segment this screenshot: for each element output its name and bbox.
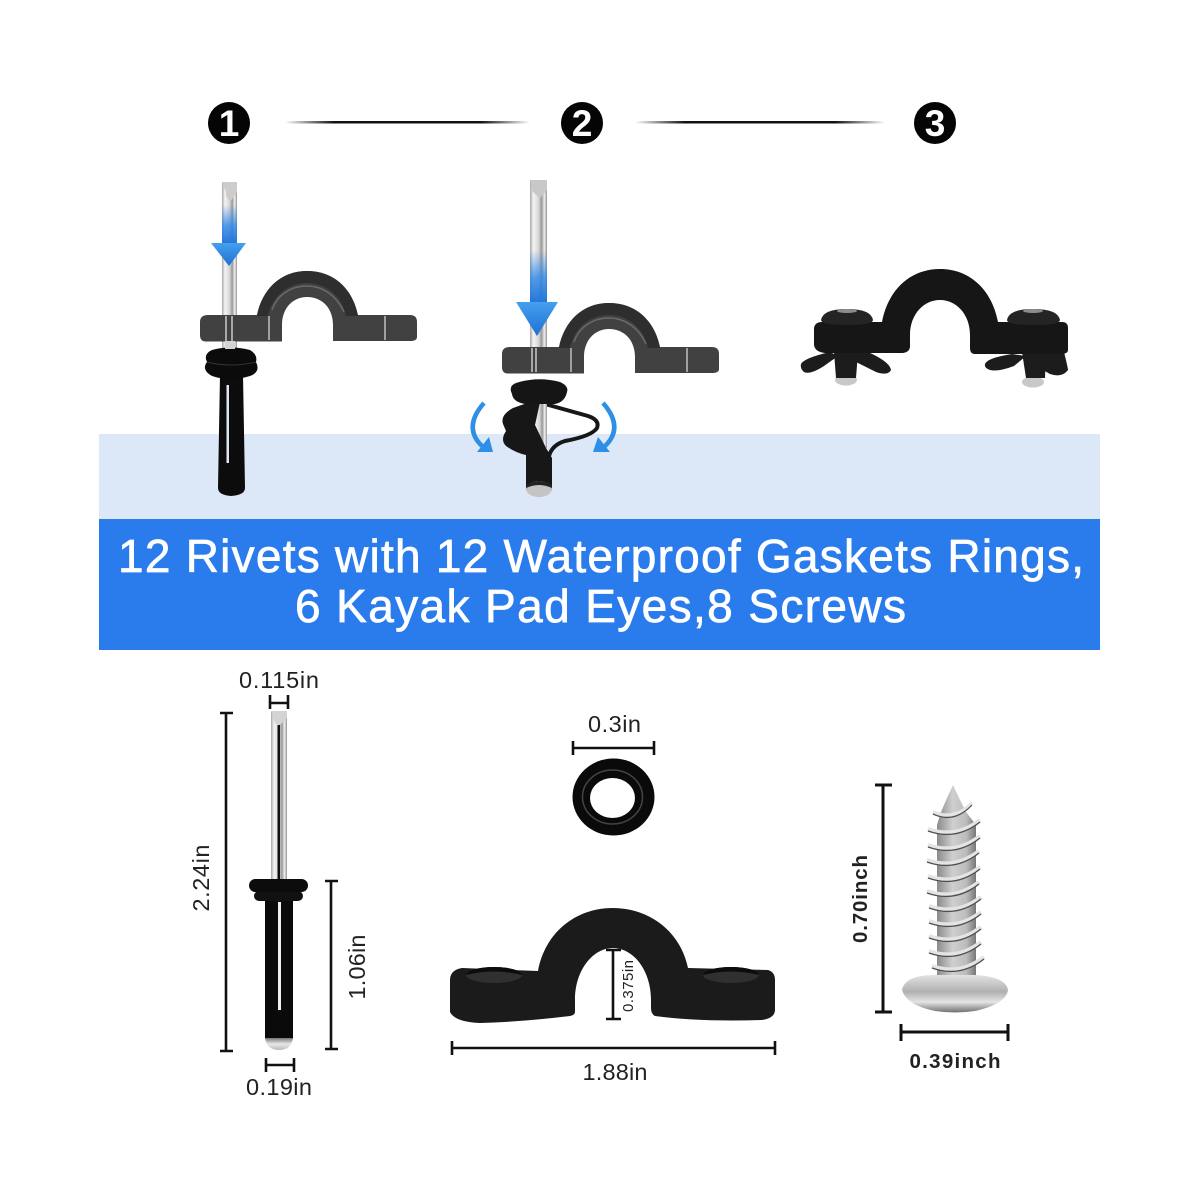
- right hole: [703, 967, 759, 983]
- dimension 2.24in: [188, 713, 233, 1051]
- screw tip and shank: [937, 785, 976, 982]
- right screw head: [1007, 309, 1060, 325]
- dimension 0.39inch: 0.39inch: [910, 1050, 1000, 1073]
- step 2 badge: [561, 102, 603, 144]
- gasket ring diagram: [572, 711, 654, 836]
- rivet mandrel: [222, 182, 237, 352]
- rivet dimension diagram: [188, 667, 370, 1100]
- rivet gaskets: [249, 879, 308, 901]
- dimension 0.70inch: [849, 785, 892, 1012]
- dimension 0.375in: [606, 950, 637, 1019]
- left rivet tip: [835, 374, 857, 386]
- light blue band: [99, 434, 1100, 519]
- left curved arrow: [473, 403, 493, 452]
- step 3 illustration: installed pad eye: [801, 269, 1068, 388]
- connector line 2 to 3: [635, 121, 885, 124]
- step 1 badge: 1: [219, 103, 239, 144]
- banner line 2: 6 Kayak Pad Eyes,8 Screws: [295, 580, 906, 632]
- step indicators: [208, 102, 956, 144]
- rivet body and gasket: [205, 341, 258, 496]
- dimension 0.115in: 0.115in: [239, 667, 319, 693]
- step 3 badge: [914, 102, 956, 144]
- mandrel highlight through pad: [226, 316, 232, 341]
- rivet mandrel: [271, 711, 287, 881]
- dimension 0.70inch: 0.70inch: [849, 855, 872, 943]
- expanded rivet: [502, 379, 598, 497]
- screw threads: [927, 803, 984, 971]
- banner line 1: 12 Rivets with 12 Waterproof Gaskets Rings,: [118, 530, 1084, 582]
- dimension 1.88in: 1.88in: [582, 1059, 648, 1085]
- rivet dome: [265, 1038, 293, 1050]
- O-ring: [572, 758, 654, 836]
- screw dimension diagram: [849, 785, 1008, 1073]
- pad eye dimension diagram: [450, 908, 775, 1085]
- screw head: [902, 975, 1008, 1012]
- dimension 0.19in: 0.19in: [246, 1074, 312, 1100]
- right wings: [985, 352, 1068, 378]
- dimension 1.88in: [452, 1041, 775, 1085]
- step 2 illustration: rivet expanding: [473, 180, 719, 497]
- blue down arrow: [516, 250, 558, 336]
- blue down arrow: [211, 205, 246, 266]
- pad eye side view: [502, 303, 719, 374]
- dimension 1.06in: 1.06in: [344, 934, 370, 1000]
- blue title banner: [99, 519, 1100, 650]
- dimension 0.19in: [246, 1058, 312, 1100]
- rivet body: [265, 898, 293, 1039]
- step 3 badge: 3: [925, 103, 945, 144]
- dimension 2.24in: 2.24in: [188, 844, 214, 912]
- right curved arrow: [593, 403, 614, 452]
- left screw head: [821, 309, 873, 325]
- step 1 badge: [208, 102, 250, 144]
- left wings: [801, 352, 891, 378]
- pad eye body: [814, 269, 1068, 354]
- dimension 0.39inch: [901, 1024, 1008, 1073]
- dimension 0.375in: 0.375in: [620, 960, 637, 1012]
- connector line 1 to 2: [285, 121, 530, 124]
- mandrel highlight through pad: [532, 348, 536, 372]
- step 1 illustration: rivet inserted through pad eye: [200, 182, 417, 496]
- rivet mandrel: [530, 180, 547, 350]
- pad eye side view: [200, 271, 417, 342]
- dimension 0.3in: 0.3in: [588, 711, 641, 737]
- right rivet tip: [1022, 376, 1044, 388]
- dimension 1.06in: [325, 881, 370, 1049]
- step 2 badge: 2: [572, 103, 592, 144]
- left hole: [466, 967, 522, 983]
- pad eye body: [450, 908, 775, 1023]
- dimension 0.115in: [239, 667, 319, 709]
